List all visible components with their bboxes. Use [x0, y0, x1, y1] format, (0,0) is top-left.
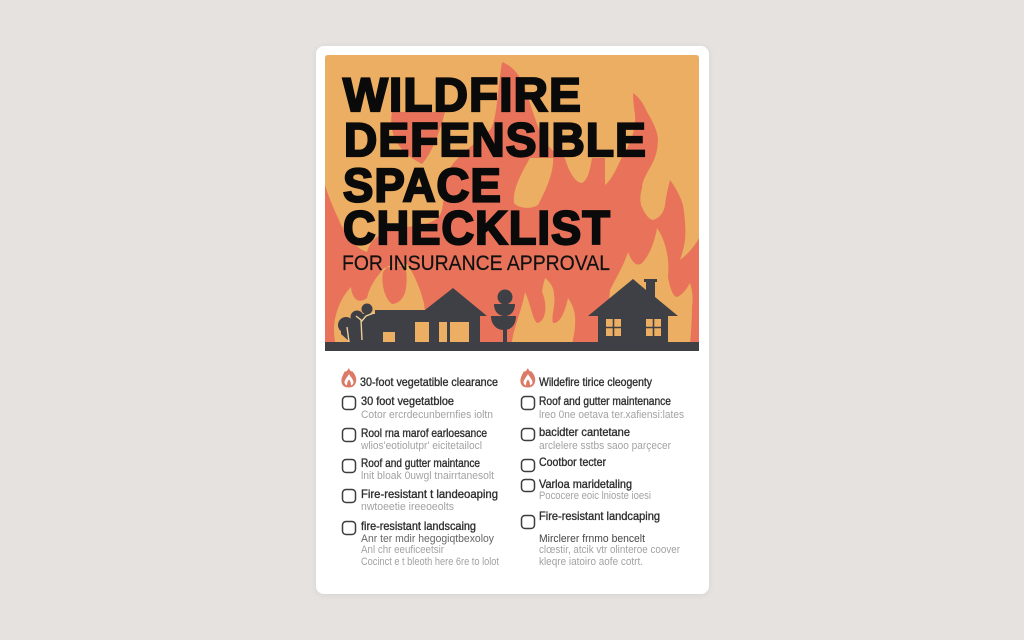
left item 2: [342, 426, 487, 452]
right item 3: Cootbor tecter: [539, 455, 606, 469]
right item 1: lreo 0ne oetava ter.xafiensi:lates: [539, 409, 684, 421]
left item 3: [342, 456, 494, 482]
right item 5: Mirclerer frnmo bencelt: [539, 533, 645, 545]
icon: right house: [588, 279, 678, 344]
icon: center tree: [491, 290, 516, 343]
right heading: Wildefire tirice cleogenty: [539, 375, 652, 389]
flames: red streak behind title: [391, 112, 445, 164]
right item 5: Fire-resistant landcaping: [539, 509, 660, 523]
left item 5: Anr ter mdir hegogiqtbexoloy: [361, 533, 494, 545]
right item 2: bacidter cantetane: [539, 425, 630, 439]
left item 1: [342, 394, 493, 421]
title: [343, 68, 647, 254]
left item 3: lnit bloak 0uwgl tnairrtanesolt: [361, 470, 494, 482]
right checklist column: [520, 368, 684, 568]
left heading: 30-foot vegetatible clearance: [360, 375, 498, 389]
left item 1: 30 foot vegetatbloe: [361, 394, 454, 408]
right item 4: [522, 477, 651, 502]
flames: right yellow behind house: [605, 228, 693, 345]
left item 4: Fire-resistant t landeoaping: [361, 487, 498, 501]
left item 2: Rool rna marof earloesance: [361, 426, 487, 440]
flames: lower left yellow: [334, 264, 425, 345]
left checklist column: [341, 368, 499, 568]
right item 1: Roof and gutter maintenance: [539, 394, 671, 408]
left item 4: [342, 487, 498, 513]
right item 3: [522, 455, 606, 472]
right item 5: [522, 509, 680, 568]
icon: left trees: [338, 304, 376, 342]
card: [316, 46, 709, 594]
left item 1: Cotor ercrdecunbernfies ioltn: [361, 409, 493, 421]
right item 1: [522, 394, 684, 421]
title: SPACE: [343, 158, 502, 212]
title: CHECKLIST: [343, 201, 611, 254]
right item 2: [522, 425, 671, 452]
right item 4: Varloa maridetaling: [539, 477, 632, 491]
flames: yellow tongue under title: [514, 158, 553, 208]
right item 4: Pococere eoic lnioste ioesi: [539, 490, 651, 502]
icon: bungalow house: [375, 288, 487, 344]
left item 5: Cocinct e t bleoth here 6re to lolot: [361, 556, 499, 568]
ground: [325, 342, 699, 351]
flames: red main silhouette: [325, 62, 699, 345]
header illustration panel: [325, 55, 699, 351]
left item 5: Anl chr eeuficeetsir: [361, 544, 444, 556]
left item 3: Roof and gutter maintance: [361, 456, 480, 470]
subtitle: FOR INSURANCE APPROVAL: [342, 252, 610, 275]
icon: flame left: [341, 368, 356, 388]
left item 2: wlios'eotiolutpr' eicitetailocl: [360, 440, 482, 452]
icon: flame right: [520, 368, 535, 388]
left item 4: nwtoeetie ireeoeolts: [361, 501, 454, 513]
right item 2: arclelere sstbs saoo parçecer: [539, 440, 671, 452]
left item 5: fire-resistant landscaing: [361, 519, 476, 533]
right item 5: kleqre iatoiro aofe cotrt.: [539, 556, 643, 568]
title: DEFENSIBLE: [344, 113, 647, 166]
right item 5: clœstir, atcik vtr olinteroe coover: [539, 544, 680, 556]
flames: bottom centre yellow: [512, 278, 575, 345]
title: WILDFIRE: [343, 68, 582, 121]
left item 5: [342, 519, 499, 568]
